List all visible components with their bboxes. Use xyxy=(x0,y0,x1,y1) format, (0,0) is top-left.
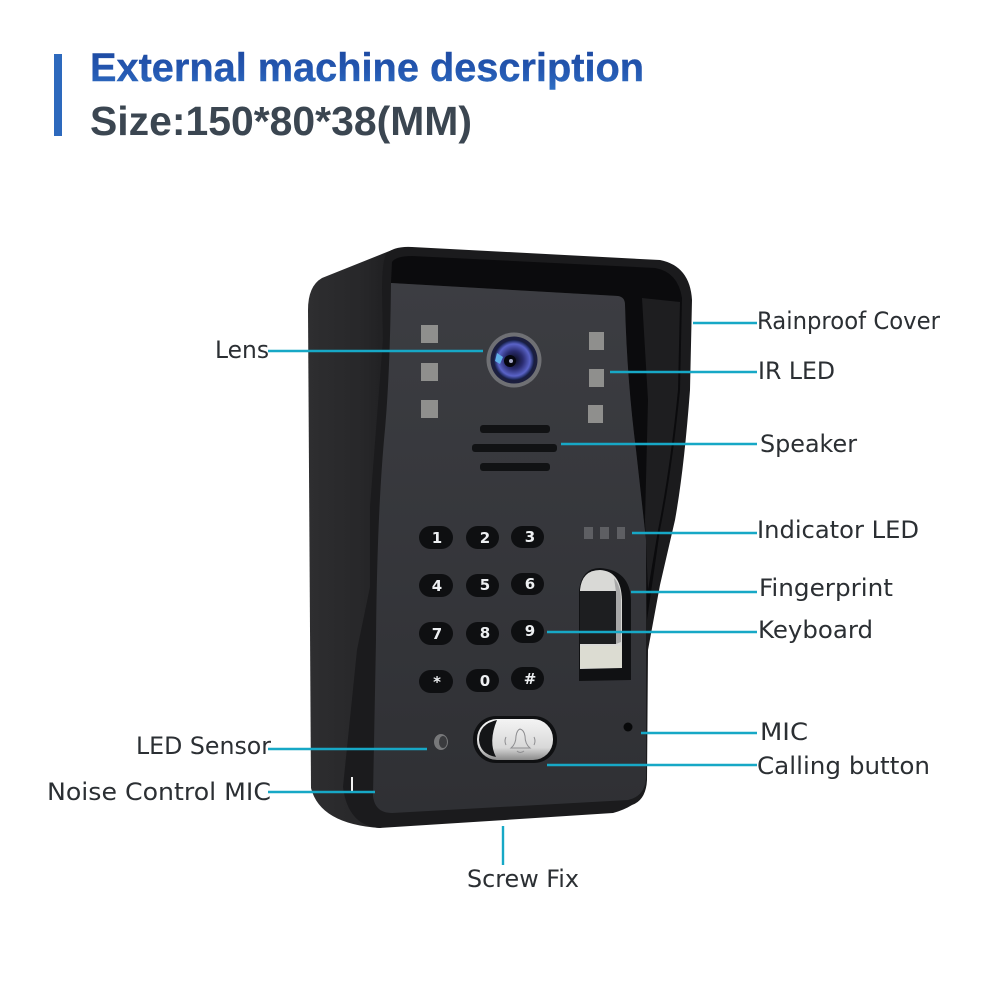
keypad: 6 xyxy=(525,575,535,593)
keypad: * xyxy=(433,673,441,691)
LED sensor xyxy=(434,734,448,750)
label: LED Sensor: LED Sensor xyxy=(136,732,271,760)
noise control MIC slot xyxy=(351,777,353,791)
label: Speaker: Speaker xyxy=(760,430,857,458)
front panel xyxy=(373,283,646,813)
keypad: 9 xyxy=(525,622,535,640)
icon: bell xyxy=(505,729,535,752)
keypad: 7 xyxy=(432,625,442,643)
leader lines xyxy=(268,323,757,865)
keypad: # xyxy=(524,670,536,688)
title: External machine description xyxy=(90,46,644,90)
IR LED array xyxy=(421,325,604,423)
label: Rainproof Cover: Rainproof Cover xyxy=(757,307,940,335)
camera lens xyxy=(486,332,542,388)
keypad: 8 xyxy=(480,624,490,642)
speaker slots xyxy=(472,425,557,471)
calling button xyxy=(473,716,557,763)
label: Noise Control MIC: Noise Control MIC xyxy=(47,778,271,806)
keypad: 1 xyxy=(432,529,442,547)
cover inner side xyxy=(642,298,680,590)
rainproof cover xyxy=(343,247,692,828)
label: Indicator LED: Indicator LED xyxy=(757,516,919,544)
keypad: 2 xyxy=(480,529,490,547)
cover inner shadow xyxy=(391,256,682,620)
keypad xyxy=(419,526,544,693)
indicator LEDs xyxy=(584,527,625,539)
MIC hole xyxy=(624,722,632,732)
label: IR LED: IR LED xyxy=(758,357,835,385)
label: Fingerprint: Fingerprint xyxy=(759,574,893,602)
fingerprint reader xyxy=(579,568,631,681)
door station device xyxy=(308,247,692,828)
label: Keyboard: Keyboard xyxy=(758,616,873,644)
label: Screw Fix: Screw Fix xyxy=(467,865,579,893)
label: Calling button: Calling button xyxy=(757,752,930,780)
label: Lens: Lens xyxy=(215,336,269,364)
label: MIC: MIC xyxy=(760,718,808,746)
keypad: 0 xyxy=(480,672,490,690)
size subtitle: Size:150*80*38(MM) xyxy=(90,98,472,144)
keypad: 3 xyxy=(525,528,535,546)
header accent bar xyxy=(54,54,62,136)
rear housing xyxy=(308,250,400,828)
keypad: 4 xyxy=(432,577,442,595)
keypad: 5 xyxy=(480,576,490,594)
